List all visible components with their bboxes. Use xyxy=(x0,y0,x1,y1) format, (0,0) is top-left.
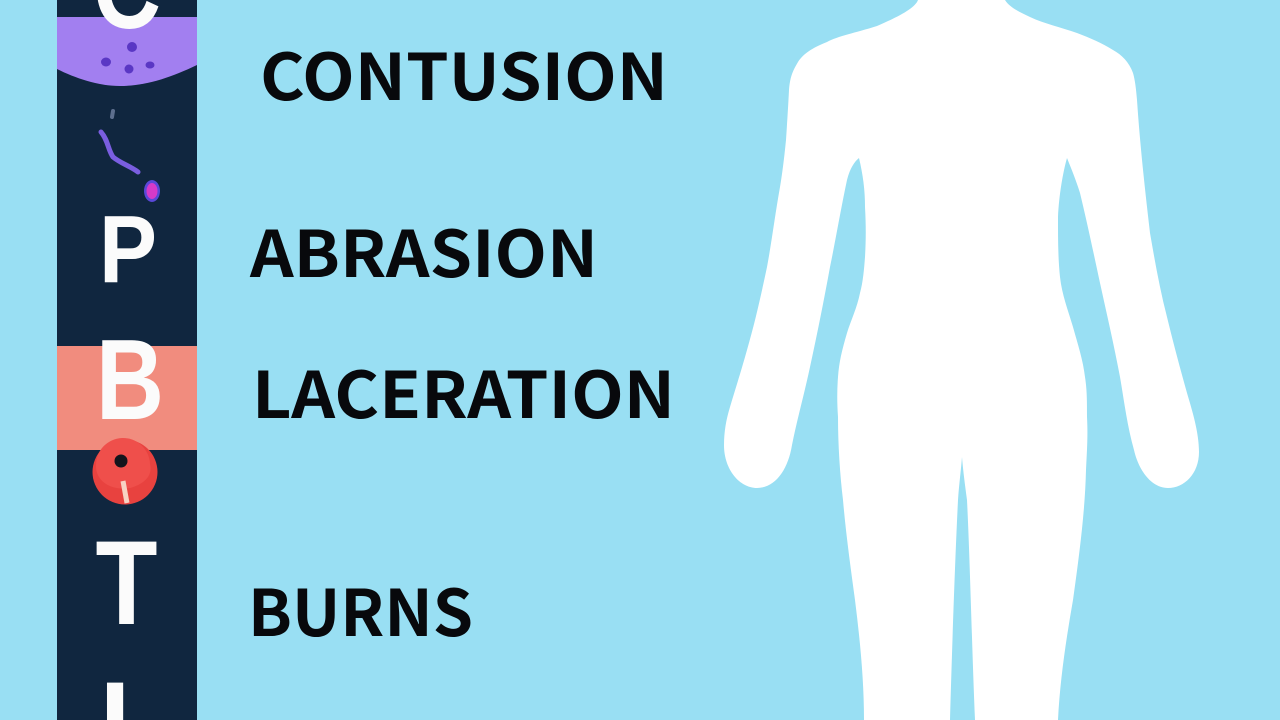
panel: letter column xyxy=(57,0,197,720)
letter T: T xyxy=(96,516,158,650)
band: contusion purple swatch xyxy=(57,17,197,86)
heading: laceration: LACERATION xyxy=(252,345,675,437)
letter P: P xyxy=(99,196,157,303)
heading: contusion: CONTUSION xyxy=(260,27,668,119)
body silhouette xyxy=(724,0,1199,720)
letter B: B xyxy=(96,317,164,444)
band: laceration salmon swatch xyxy=(57,346,197,450)
heading: burns: BURNS xyxy=(248,563,473,655)
icon: abrasion scratch xyxy=(101,111,160,202)
icon: burn wound xyxy=(92,438,158,504)
heading: abrasion: ABRASION xyxy=(249,204,598,296)
